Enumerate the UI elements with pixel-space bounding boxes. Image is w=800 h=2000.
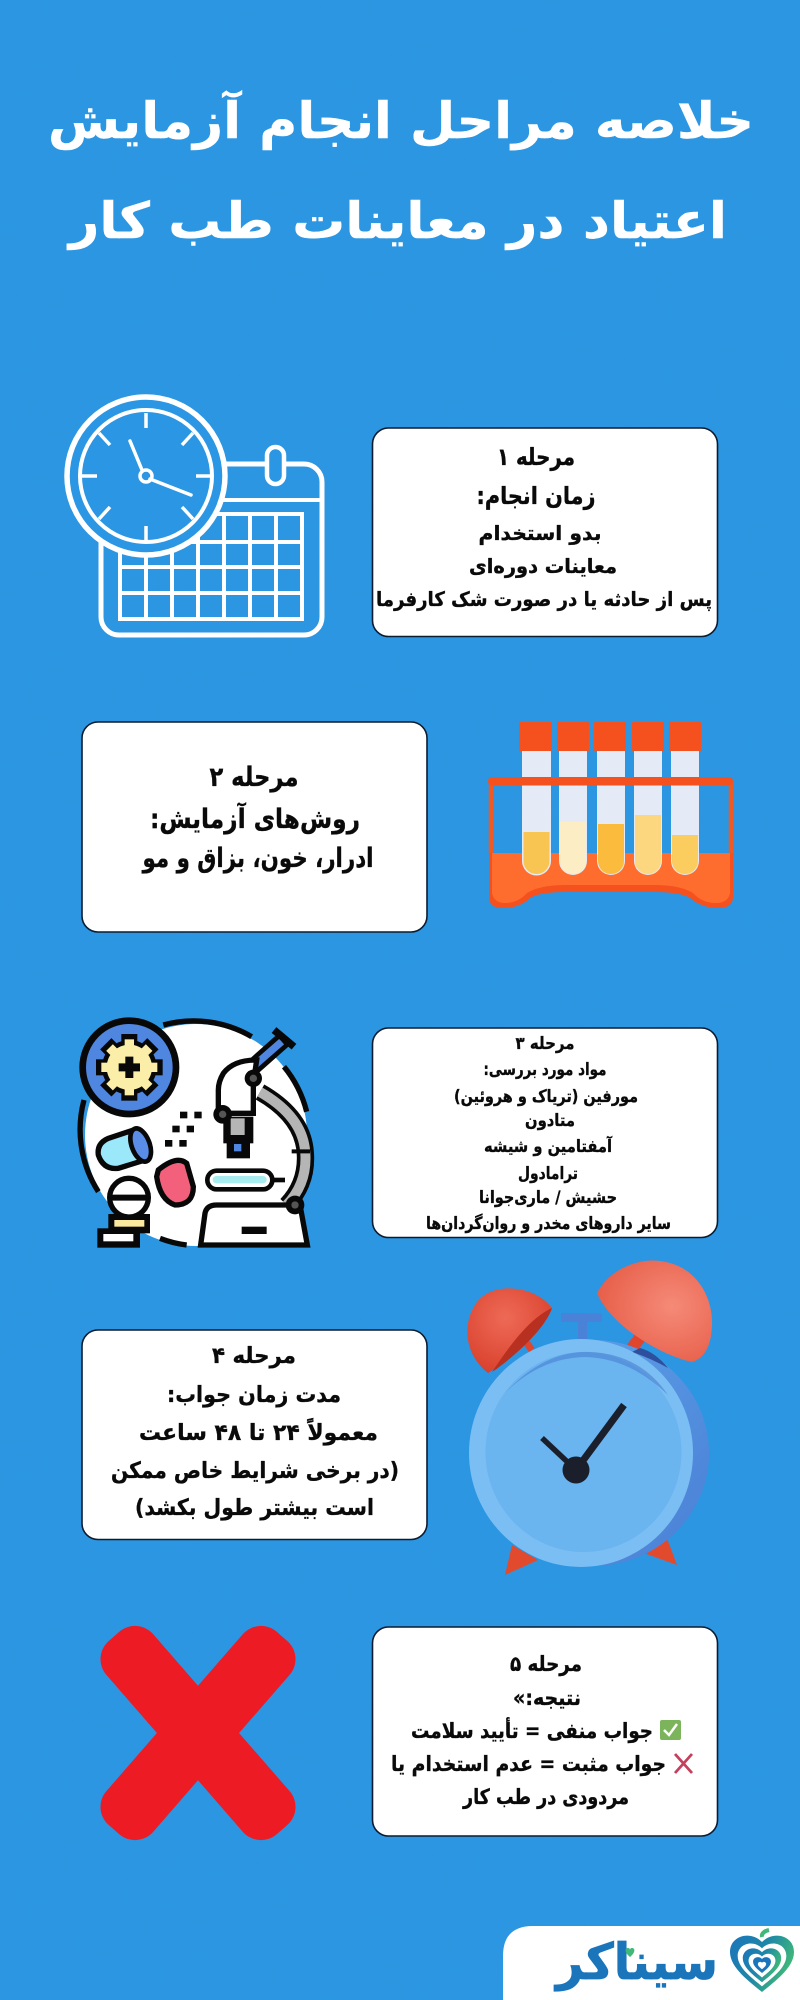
panel: step 3: مواد مورد بررسی: bbox=[484, 1060, 606, 1080]
panel: step 4: مدت زمان جواب: bbox=[167, 1382, 341, 1408]
panel: step 5: نتیجه:» bbox=[513, 1686, 581, 1710]
microscope bbox=[201, 1030, 310, 1245]
panel: step 2 bbox=[82, 722, 427, 932]
logo wordmark: سیناکر bbox=[553, 1933, 718, 1992]
logo panel bbox=[503, 1926, 800, 2000]
icon: gear badge bbox=[83, 1021, 176, 1114]
panel: step 4: معمولاً ۲۴ تا ۴۸ ساعت bbox=[139, 1418, 378, 1446]
panel: step 3 bbox=[372, 1028, 718, 1238]
panel: step 2: مرحله ۲ bbox=[210, 762, 298, 793]
title: اعتیاد در معاینات طب کار bbox=[66, 192, 727, 250]
panel: step 3: آمفتامین و شیشه bbox=[484, 1135, 613, 1157]
panel: step 5: جواب منفی = تأیید سلامت bbox=[411, 1716, 653, 1743]
title: خلاصه مراحل انجام آزمایش bbox=[48, 90, 754, 151]
icon: green check bbox=[660, 1720, 681, 1740]
panel: step 4: مرحله ۴ bbox=[212, 1343, 296, 1369]
panel: step 5 bbox=[372, 1627, 718, 1836]
panel: step 1: پس از حادثه یا در صورت شک کارفرما bbox=[376, 587, 712, 612]
panel: step 1: معاینات دوره‌ای bbox=[469, 554, 617, 578]
panel: step 5: جواب مثبت = عدم استخدام یا bbox=[391, 1752, 666, 1776]
panel: step 1 bbox=[372, 428, 718, 636]
icon: alarm clock bbox=[467, 1260, 712, 1575]
icon: test tube rack bbox=[488, 722, 733, 908]
panel: step 3: مرحله ۳ bbox=[516, 1034, 574, 1054]
panel: step 1: زمان انجام: bbox=[476, 482, 596, 510]
panel: step 1: بدو استخدام bbox=[478, 521, 602, 545]
panel: step 1: مرحله ۱ bbox=[497, 443, 575, 471]
panel: step 3: سایر داروهای مخدر و روان‌گردان‌ها bbox=[426, 1213, 671, 1234]
panel: step 4: است بیشتر طول بکشد) bbox=[135, 1495, 374, 1521]
icon: microscope and pills bbox=[80, 1021, 310, 1248]
logo heart icon bbox=[730, 1930, 794, 1992]
panel: step 3: مورفین (تریاک و هروئین) bbox=[454, 1087, 638, 1107]
panel: step 3: حشیش / ماری‌جوانا bbox=[479, 1188, 617, 1208]
panel: step 5: مرحله ۵ bbox=[510, 1652, 582, 1676]
panel: step 4: (در برخی شرایط خاص ممکن bbox=[111, 1458, 399, 1484]
title bbox=[48, 90, 754, 250]
icon: calendar with clock bbox=[67, 397, 322, 635]
pills bbox=[97, 1112, 202, 1248]
panel: step 3: متادون bbox=[525, 1111, 575, 1131]
icon: red x bbox=[675, 1754, 692, 1773]
panel: step 2: روش‌های آزمایش: bbox=[150, 802, 360, 835]
panel: step 5: مردودی در طب کار bbox=[462, 1785, 629, 1809]
icon: red cross bbox=[91, 1616, 305, 1850]
panel: step 4 bbox=[82, 1330, 427, 1540]
panel: step 2: ادرار، خون، بزاق و مو bbox=[141, 843, 374, 874]
panel: step 3: ترامادول bbox=[518, 1164, 578, 1184]
